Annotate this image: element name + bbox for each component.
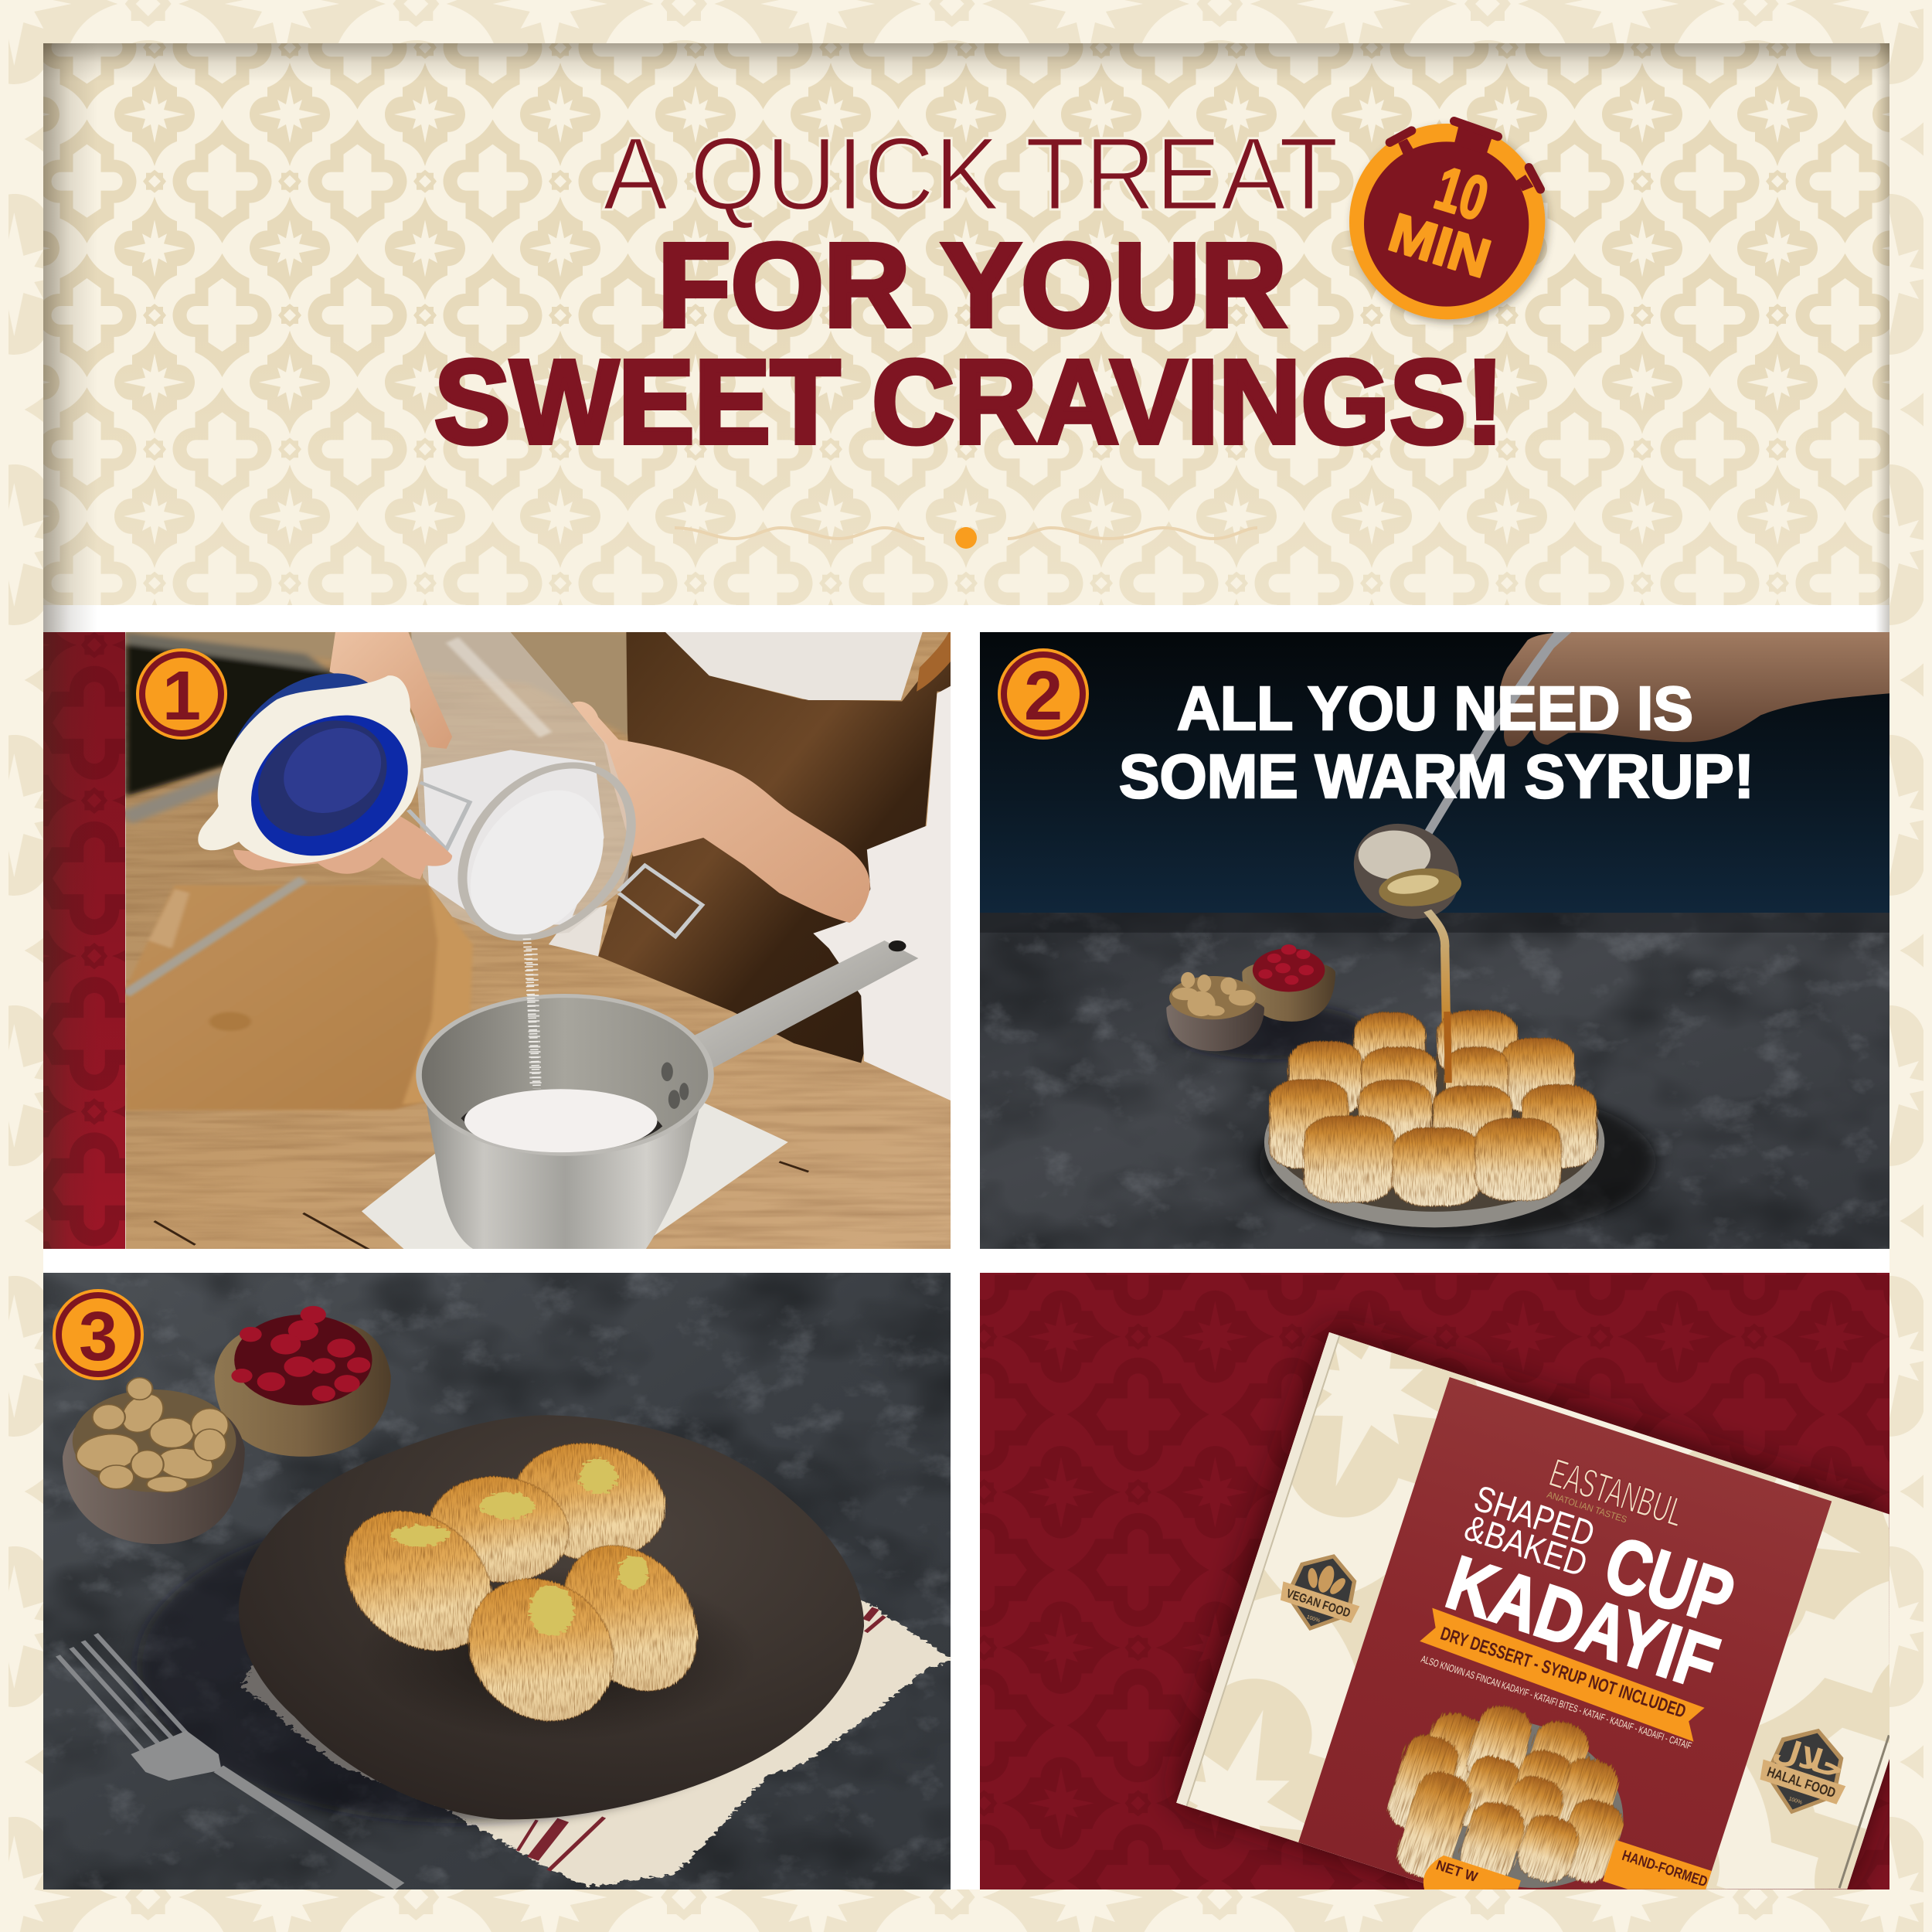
tray xyxy=(1264,1056,1604,1227)
napkin xyxy=(242,1587,951,1886)
pistachio bowl xyxy=(63,1378,245,1544)
ladle bowl xyxy=(1339,816,1474,927)
badge: step 1 xyxy=(136,648,227,740)
heading: FOR YOUR: FOR YOUR xyxy=(658,219,1287,352)
white shirt xyxy=(549,632,955,1103)
tray shadow xyxy=(1260,1087,1656,1237)
badge: step 2 xyxy=(998,648,1089,740)
slate background xyxy=(43,1271,955,1889)
pomegranate bowl xyxy=(214,1306,391,1457)
wire clip xyxy=(619,866,702,937)
pomegranate bowl xyxy=(1242,944,1335,1022)
knife on the board xyxy=(126,879,303,994)
halal badge: حلال xyxy=(1769,1730,1849,1787)
product title xyxy=(1436,1475,1749,1706)
orange banner: DRY DESSERT - SYRUP NOT INCLUDED xyxy=(1438,1623,1689,1723)
blurred kitchen background xyxy=(126,632,633,818)
tray on label xyxy=(1369,1679,1648,1932)
vegan badge xyxy=(1271,1542,1372,1643)
panel 4: product box on red background xyxy=(980,1273,1932,1932)
panel 1: red pattern strip xyxy=(43,632,125,1249)
plate shadow under food xyxy=(359,1567,756,1740)
panel 3: photo of plated kadayif xyxy=(43,1271,955,1889)
heading: A QUICK TREAT: A QUICK TREAT xyxy=(603,117,1338,232)
syrup stream xyxy=(1427,911,1447,1083)
panel 1: photo of sugar poured into a pan xyxy=(126,632,955,1250)
syrup over kadayif xyxy=(1447,1012,1448,1083)
red label xyxy=(1298,1377,1832,1932)
fork xyxy=(58,1634,400,1886)
apron xyxy=(598,632,955,1063)
icon: 10 minute stopwatch: MIN xyxy=(1383,202,1497,289)
icon: 10 minute stopwatch: 10 xyxy=(1427,153,1495,233)
product title: &BAKED xyxy=(1460,1506,1592,1584)
ladle handle xyxy=(1424,632,1571,835)
red patterned background xyxy=(980,1273,1889,1889)
panel 2 text: ALL YOU NEED IS xyxy=(1177,674,1693,743)
badge: step 3 xyxy=(53,1289,144,1380)
vegan badge: VEGAN FOOD xyxy=(1284,1587,1352,1621)
table wood xyxy=(126,632,955,1250)
halal badge xyxy=(1750,1716,1860,1827)
scale under pan xyxy=(362,1103,788,1250)
cutting board xyxy=(126,885,473,1111)
slate table xyxy=(980,913,1892,1250)
saucepan xyxy=(419,940,918,1250)
hand-formed tag xyxy=(1603,1840,1712,1912)
plate shadow xyxy=(137,1508,791,1823)
product box xyxy=(1175,1332,1932,1932)
badge: step 3: 3 xyxy=(79,1298,117,1376)
heading: SWEET CRAVINGS!: SWEET CRAVINGS! xyxy=(434,335,1504,468)
jar lid xyxy=(195,657,434,869)
hand holding ladle xyxy=(1499,632,1889,747)
kadayif pieces xyxy=(320,1432,718,1729)
icon: 10 minute stopwatch xyxy=(1349,121,1545,319)
black plate xyxy=(239,1415,864,1819)
panel 2: photo of syrup poured over kadayif xyxy=(980,632,1892,1250)
vegan badge: 100% xyxy=(1306,1614,1321,1624)
badge: step 1: 1 xyxy=(162,658,201,735)
table cracks xyxy=(155,1162,808,1250)
jar xyxy=(411,632,636,941)
net weight tag: NET W xyxy=(1434,1857,1479,1885)
dark wall xyxy=(980,632,1892,913)
pistachio crumbs xyxy=(391,1459,648,1635)
frame inner shadow xyxy=(43,43,1889,1249)
header panel with lattice pattern xyxy=(43,43,1889,605)
hand-formed tag: HAND-FORMED xyxy=(1620,1848,1709,1890)
product title: SHAPED xyxy=(1469,1477,1600,1554)
product title: CUP xyxy=(1595,1520,1743,1642)
forearm and right hand xyxy=(572,702,870,923)
pistachio bowl xyxy=(1166,972,1264,1051)
left hand and fingers xyxy=(233,632,452,879)
orange banner xyxy=(1417,1607,1708,1742)
kadayif pieces xyxy=(1270,1011,1597,1206)
product title: KADAYIF xyxy=(1437,1539,1728,1706)
net weight tag xyxy=(1420,1852,1521,1917)
bowl shadow xyxy=(1172,1004,1370,1059)
brand logo: ANATOLIAN TASTES xyxy=(1546,1489,1628,1525)
divider: wave lines and dot xyxy=(675,527,1257,549)
panel 2 text xyxy=(1119,674,1754,811)
halal badge: 100% xyxy=(1787,1796,1803,1806)
panel 2 text: SOME WARM SYRUP! xyxy=(1119,742,1754,811)
badge: step 2: 2 xyxy=(1024,658,1063,735)
brand logo: EASTANBUL xyxy=(1544,1451,1689,1536)
sugar stream xyxy=(527,938,537,1089)
also known as line: ALSO KNOWN AS FINCAN KADAYIF - KATAIFI BITES - KATAIF - KADAIF - KADAIFI - CATAIF xyxy=(1420,1653,1693,1752)
halal badge: HALAL FOOD xyxy=(1765,1764,1838,1801)
brand logo xyxy=(1543,1451,1689,1541)
